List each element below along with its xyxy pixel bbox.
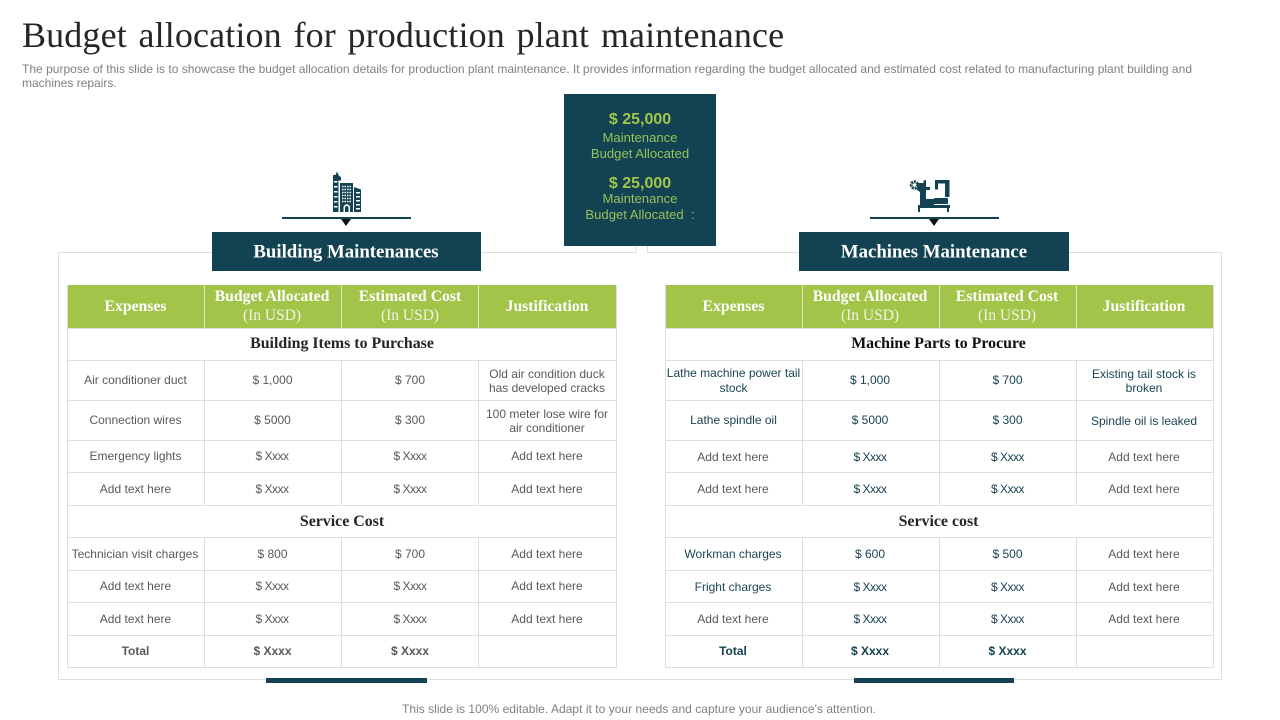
table grid bbox=[666, 285, 1214, 668]
rows: machine placeholders: $ Xxxx bbox=[991, 450, 1025, 464]
rows: machine placeholders: Add text here bbox=[1108, 482, 1180, 496]
rows: building items: $ Xxxx bbox=[393, 449, 427, 463]
center budget box: $ 25,000 bbox=[609, 111, 671, 128]
rows: machine parts: broken bbox=[1126, 381, 1162, 395]
center budget box: Budget Allocated bbox=[591, 146, 689, 161]
rows: service placeholders: Add text here bbox=[1108, 612, 1180, 626]
rows: building items: Emergency lights bbox=[89, 449, 182, 463]
pointer: machine bbox=[870, 217, 999, 226]
rows: machine placeholders: Add text here bbox=[1108, 450, 1180, 464]
section: building items: Building Items to Purchase bbox=[250, 335, 434, 352]
rows: service cost bbox=[72, 547, 583, 626]
rows: machine placeholders: Add text here bbox=[697, 482, 769, 496]
rows: building items: Add text here bbox=[511, 449, 583, 463]
section: service cost: Service cost bbox=[899, 513, 979, 530]
pointer: building bbox=[282, 217, 411, 226]
rows: service placeholders: Add text here bbox=[1108, 547, 1180, 561]
table header: Justification bbox=[506, 298, 589, 315]
rows: machine parts: Lathe machine power tail bbox=[667, 366, 800, 380]
total row: $ Xxxx bbox=[851, 644, 889, 658]
rows: building items: Add text here bbox=[511, 482, 583, 496]
rows: machine parts: $ 1,000 bbox=[850, 373, 890, 387]
rows: service placeholders: Add text here bbox=[1108, 580, 1180, 594]
table header: (In USD) bbox=[381, 307, 439, 324]
rows: service cost: Add text here bbox=[100, 579, 172, 593]
table header bbox=[665, 285, 1214, 328]
rows: service cost: $ 700 bbox=[395, 547, 425, 561]
description bbox=[22, 62, 1192, 90]
rows: machine parts: Lathe spindle oil bbox=[690, 413, 777, 427]
rows: service cost: Fright charges bbox=[695, 580, 771, 594]
description: The purpose of this slide is to showcase the budget allocation details for production plant maintenance. It provides information regarding the budget allocated and estimated cost related to manufacturing plant building and bbox=[22, 62, 1192, 76]
rows: machine parts: $ 700 bbox=[992, 373, 1023, 387]
table header: Budget Allocated bbox=[215, 288, 330, 305]
table header: (In USD) bbox=[978, 307, 1036, 324]
rows: building items: Air conditioner duct bbox=[84, 373, 188, 387]
rows: machine placeholders: $ Xxxx bbox=[853, 482, 887, 496]
center budget box bbox=[564, 94, 716, 246]
center budget box: Maintenance bbox=[603, 191, 677, 206]
table header: Estimated Cost bbox=[359, 288, 462, 305]
rows: service cost: Add text here bbox=[511, 547, 583, 561]
heading: machines maintenance: Machines Maintenance bbox=[841, 242, 1027, 262]
rows: service cost: $ Xxxx bbox=[393, 579, 427, 593]
icon: building bbox=[333, 172, 361, 212]
heading: machines maintenance bbox=[799, 232, 1069, 271]
panel frame bbox=[58, 246, 1222, 680]
rows: service cost: $ Xxxx bbox=[255, 612, 289, 626]
rows: building items: $ 700 bbox=[395, 373, 425, 387]
icon: machine bbox=[911, 180, 950, 212]
table header: Justification bbox=[1103, 298, 1186, 315]
rows: service cost: Add text here bbox=[511, 579, 583, 593]
rows: service cost: Technician visit charges bbox=[72, 547, 198, 561]
rows: service cost: $ 600 bbox=[855, 547, 885, 561]
table: machines maintenance bbox=[665, 285, 1214, 668]
rows: building items bbox=[84, 367, 608, 496]
rows: service cost: Add text here bbox=[100, 612, 172, 626]
section: service cost: Service Cost bbox=[300, 513, 385, 530]
rows: building items: $ 5000 bbox=[254, 413, 291, 427]
rows: service cost bbox=[684, 547, 1025, 626]
rows: service placeholders bbox=[697, 547, 1180, 626]
total row: Total bbox=[122, 644, 149, 658]
total row: $ Xxxx bbox=[391, 644, 429, 658]
description: machines repairs. bbox=[22, 76, 117, 90]
total row bbox=[122, 644, 429, 658]
rows: service cost: $ Xxxx bbox=[991, 612, 1025, 626]
rows: machine placeholders: $ Xxxx bbox=[991, 482, 1025, 496]
rows: service cost: $ Xxxx bbox=[853, 580, 887, 594]
rows: building items: Connection wires bbox=[89, 413, 182, 427]
heading: building maintenances: Building Maintenances bbox=[253, 242, 439, 262]
total row bbox=[719, 644, 1027, 658]
center budget box: Budget Allocated : bbox=[585, 207, 695, 222]
title: Budget allocation for production plant maintenance bbox=[22, 15, 784, 55]
table header: Expenses bbox=[105, 298, 166, 315]
rows: building items: 100 meter lose wire for bbox=[486, 407, 608, 421]
footer note: This slide is 100% editable. Adapt it to your needs and capture your audience's attention. bbox=[402, 702, 876, 716]
rows: service cost: $ Xxxx bbox=[991, 580, 1025, 594]
rows: building items: $ 1,000 bbox=[252, 373, 293, 387]
rows: building items: air conditioner bbox=[509, 421, 585, 435]
rows: machine placeholders bbox=[697, 450, 1180, 496]
total row: $ Xxxx bbox=[253, 644, 292, 658]
rows: machine parts: $ 5000 bbox=[852, 413, 889, 427]
bottom accent bar: machine bbox=[854, 678, 1014, 683]
rows: service cost: $ Xxxx bbox=[853, 612, 887, 626]
table header: (In USD) bbox=[243, 307, 301, 324]
table header: Expenses bbox=[703, 298, 764, 315]
total row: Total bbox=[719, 644, 747, 658]
rows: machine parts: $ 300 bbox=[992, 413, 1023, 427]
rows: building items: $ Xxxx bbox=[393, 482, 427, 496]
rows: machine parts: stock bbox=[719, 381, 748, 395]
center budget box: Maintenance bbox=[603, 130, 677, 145]
table: building maintenances bbox=[67, 285, 617, 668]
section: machine parts: Machine Parts to Procure bbox=[851, 335, 1026, 352]
rows: machine parts: Spindle oil is leaked bbox=[1091, 414, 1197, 428]
rows: service cost: $ 800 bbox=[257, 547, 288, 561]
total row: $ Xxxx bbox=[988, 644, 1027, 658]
table header: Estimated Cost bbox=[956, 288, 1059, 305]
heading: building maintenances bbox=[212, 232, 481, 271]
rows: service cost: $ Xxxx bbox=[255, 579, 289, 593]
rows: building items: $ 300 bbox=[395, 413, 425, 427]
table header: Budget Allocated bbox=[813, 288, 928, 305]
rows: service cost: Add text here bbox=[511, 612, 583, 626]
center budget box: $ 25,000 bbox=[609, 175, 671, 192]
table header: (In USD) bbox=[841, 307, 899, 324]
rows: service cost: Workman charges bbox=[684, 547, 782, 561]
rows: building items: has developed cracks bbox=[489, 381, 605, 395]
rows: machine placeholders: $ Xxxx bbox=[853, 450, 887, 464]
rows: service cost: $ Xxxx bbox=[393, 612, 427, 626]
rows: machine parts: Existing tail stock is bbox=[1092, 367, 1196, 381]
rows: service cost: $ 500 bbox=[992, 547, 1023, 561]
rows: building items: $ Xxxx bbox=[255, 482, 289, 496]
rows: building items: Old air condition duck bbox=[489, 367, 606, 381]
rows: service placeholders: Add text here bbox=[697, 612, 769, 626]
bottom accent bar: building bbox=[266, 678, 427, 683]
table grid bbox=[68, 285, 616, 668]
rows: building items: $ Xxxx bbox=[255, 449, 289, 463]
table header bbox=[67, 285, 617, 328]
rows: machine parts bbox=[667, 366, 1197, 428]
rows: building items: Add text here bbox=[100, 482, 172, 496]
rows: machine placeholders: Add text here bbox=[697, 450, 769, 464]
